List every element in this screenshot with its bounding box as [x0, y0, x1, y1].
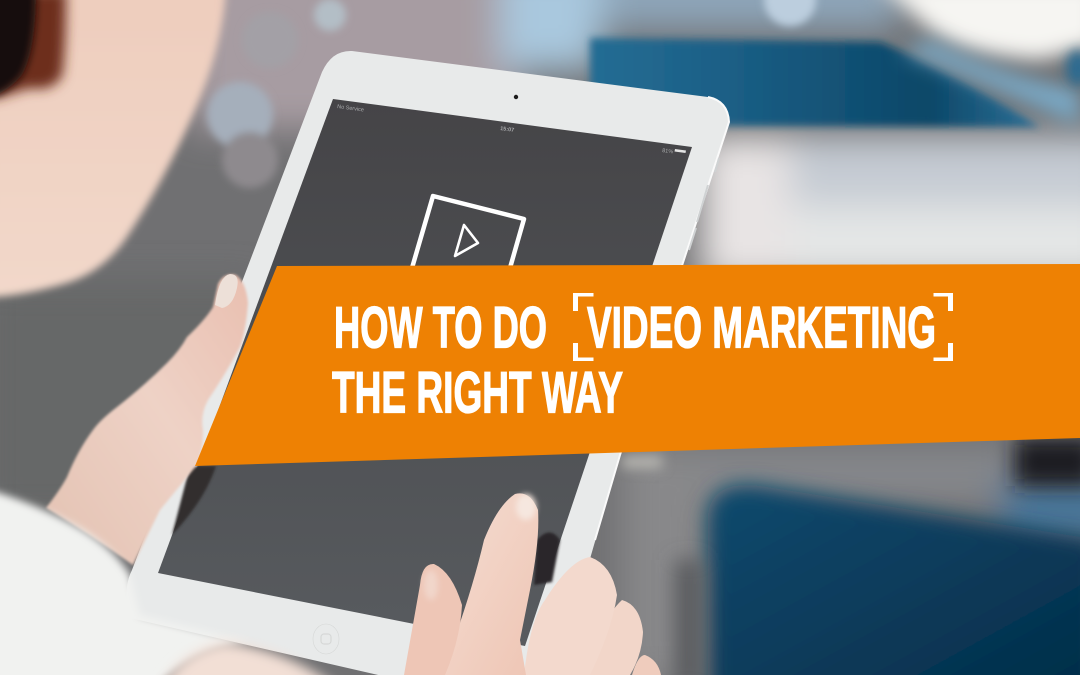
title line 2: THE RIGHT WAY [332, 360, 623, 426]
shadow under index finger [534, 532, 560, 585]
icon: camera dot [514, 95, 518, 99]
blue sofa top [590, 38, 1040, 127]
right pointing hand [404, 493, 661, 675]
dark object at far right [1015, 438, 1080, 486]
tablet side buttons [689, 158, 719, 250]
beige highlight beside tablet [622, 456, 662, 468]
tablet screen [158, 99, 692, 646]
middle finger [524, 557, 617, 675]
index finger [441, 493, 538, 675]
tablet right edge highlight [595, 97, 729, 540]
icon: battery [674, 149, 686, 153]
left holding hand [46, 274, 248, 565]
curled fingertip [424, 570, 438, 600]
head [0, 0, 226, 297]
thumbnail [215, 274, 238, 308]
screen status bar: 15:07 [500, 126, 514, 134]
orange banner [195, 264, 1080, 466]
tablet [126, 51, 729, 675]
blurred arm [160, 642, 340, 675]
sofa light edge [900, 40, 1080, 125]
index fingertip [516, 494, 536, 520]
screen status bar: No Service [337, 104, 364, 113]
hair dark [0, 0, 36, 98]
far fingers [632, 655, 661, 675]
top white wall [875, 0, 1080, 60]
bokeh lights [207, 0, 816, 188]
title line 1 left: HOW TO DO [334, 296, 547, 360]
tablet body [126, 51, 729, 675]
dark strip beside blue sofa [675, 560, 703, 675]
hair brown edge [0, 0, 66, 100]
curled finger [404, 564, 462, 675]
sleeve [0, 490, 250, 675]
blue sofa bottom [708, 485, 1080, 675]
screen status bar: 81% [662, 148, 674, 155]
icon: home button [313, 624, 339, 654]
screen status bar [337, 104, 674, 155]
person's head and hair [0, 0, 226, 297]
icon: video play frame [412, 196, 524, 268]
finger shadow on screen [172, 466, 216, 535]
palm and thumb [46, 274, 248, 565]
blue patch far right [1066, 50, 1080, 86]
title [332, 296, 936, 426]
focus brackets around video marketing [573, 293, 953, 361]
white shirt sleeve [0, 490, 340, 675]
